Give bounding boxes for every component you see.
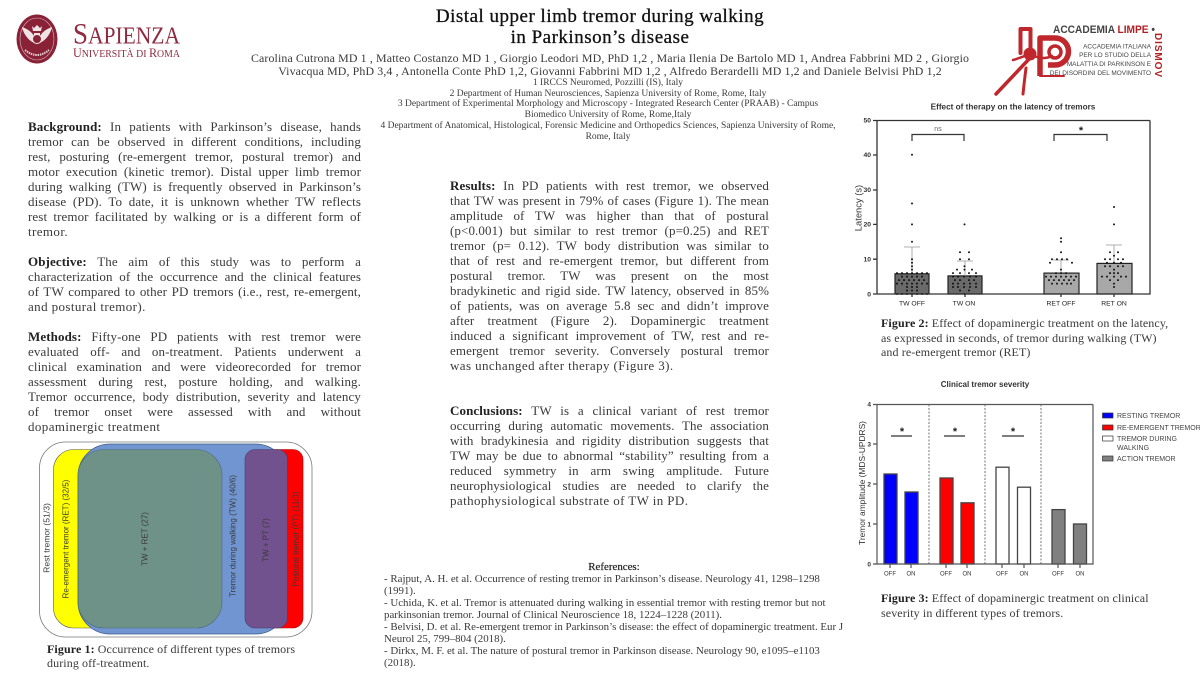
panel: re-emergent tremor <box>54 450 174 628</box>
y axis labels: 1 <box>867 522 871 528</box>
text block: background: rest, posturing (re-emergent tremor, postural tremor) and <box>28 149 361 164</box>
text block: objective: and postural tremor). <box>28 299 146 314</box>
legend: ACTION TREMOR <box>1117 456 1176 463</box>
text block: background <box>28 119 361 239</box>
text block: methods: clinical examination and were videorecorded for tremor <box>28 359 361 374</box>
text block: results: of patients, was on average 5.8 sec and didn’t improve <box>450 298 769 313</box>
references: - Rajput, A. H. et al. Occurrence of resting tremor in Parkinson’s disease. Neurology 41, 1298–1298 <box>384 573 820 585</box>
references: Neurol 25, 799–804 (2018). <box>384 633 506 645</box>
text block: results <box>450 178 769 373</box>
y axis labels: 30 <box>863 187 871 194</box>
legend <box>1102 413 1200 463</box>
logo: Accademia LIMPE-DISMOV: ACCADEMIA ITALIANA <box>1083 44 1152 50</box>
significance markers: * <box>953 426 958 438</box>
affiliations: Rome, Italy <box>586 132 630 142</box>
y axis title: Tremor amplitude (MDS-UPDRS) <box>857 421 867 545</box>
x axis labels: TW OFF <box>899 300 925 308</box>
logo: Accademia LIMPE-DISMOV: MALATTIA DI PARKINSON E <box>1067 61 1152 68</box>
significance brackets: * <box>1079 125 1084 137</box>
logo: Sapienza University of Rome: SAPIENZA <box>73 18 181 50</box>
diagram labels: Rest tremor (51/3) <box>42 503 52 573</box>
text block: methods: evaluated off- and on-treatment. Patients underwent a <box>28 344 361 359</box>
x axis labels: OFF <box>996 572 1008 578</box>
references heading: References: <box>588 561 640 573</box>
text block: background: motor execution (kinetic tremor). Distal upper limb tremor <box>28 164 361 179</box>
logo: Accademia LIMPE-DISMOV <box>994 24 1163 96</box>
text block: results: postural tremor. TW was present on the most <box>450 268 769 283</box>
y axis labels <box>867 402 871 568</box>
axes <box>873 404 1093 568</box>
legend: RE-EMERGENT TREMOR <box>1117 425 1200 432</box>
diagram labels: Re-emergent tremor (RET) (32/5) <box>62 479 70 598</box>
x axis labels: OFF <box>1052 572 1064 578</box>
diagram labels: TW + RET (27) <box>140 512 150 566</box>
text block: conclusions: pathophysiological substrate of TW in PD. <box>450 493 688 508</box>
references <box>384 561 843 669</box>
figure 2 caption: Figure 2: Effect of dopaminergic treatment on the latency, <box>881 316 1168 330</box>
significance brackets: ns <box>934 126 942 133</box>
figure 1 caption: during off-treatment. <box>47 656 150 670</box>
text block: conclusions: neurophysiological studies are needed to clarify the <box>450 478 769 493</box>
y axis labels <box>863 118 871 298</box>
axes <box>873 120 1150 297</box>
text block: conclusions: occurring during automatic movements. The association <box>450 418 769 433</box>
title: in Parkinson’s disease <box>511 26 689 48</box>
affiliations: Biomedico University of Rome, Rome,Italy <box>525 110 691 120</box>
text block: conclusions <box>450 403 769 508</box>
text block: background: tremor can be observed in different conditions, including <box>28 134 361 149</box>
panel: rest tremor <box>40 442 312 637</box>
text block: results: tremor (p= 0.12). TW body distribution was similar to <box>450 238 769 253</box>
affiliations: 2 Department of Human Neurosciences, Sapienza University of Rome, Rome, Italy <box>450 89 766 99</box>
text block: objective: characterization of the occurrence and the clinical features <box>28 269 361 284</box>
text block: results: that TW was present in 79% of cases (Figure 1). The mean <box>450 193 769 208</box>
diagram labels: Tremor during walking (TW) (40/6) <box>228 475 238 597</box>
error bars <box>904 245 1122 276</box>
logo: Accademia LIMPE-DISMOV: PER LO STUDIO DELLA <box>1079 52 1152 59</box>
diagram labels <box>42 475 300 598</box>
panel: TW + PT overlap <box>245 450 288 628</box>
y axis labels: 10 <box>863 256 871 264</box>
text block: results: amplitude of TW was higher than that of postural <box>450 208 769 223</box>
group dividers <box>929 404 1041 564</box>
panel: TW + RET overlap <box>78 450 222 628</box>
y axis labels: 50 <box>863 118 871 124</box>
text block: background: disease (PD). To date, it is unknown whether TW reflects <box>28 194 361 209</box>
bars <box>884 467 1086 564</box>
y axis labels: 4 <box>867 402 871 408</box>
significance markers: * <box>900 426 905 438</box>
affiliations: 1 IRCCS Neuromed, Pozzilli (IS), Italy <box>533 78 683 88</box>
chart title: Clinical tremor severity <box>941 380 1030 389</box>
diagram labels: Postural tremor (PT) (11/3) <box>292 491 300 586</box>
legend: RESTING TREMOR <box>1117 413 1180 420</box>
figure 1 caption <box>47 642 295 670</box>
bars <box>895 263 1132 294</box>
significance markers: * <box>1011 426 1016 438</box>
legend: WALKING <box>1117 445 1149 452</box>
text block: methods: dopaminergic treatment <box>28 419 160 434</box>
figure 2: latency bar chart <box>852 102 1151 308</box>
logo: Accademia LIMPE-DISMOV: DISMOV <box>1152 33 1163 77</box>
panel: postural tremor <box>245 450 303 628</box>
references: - Belvisi, D. et al. Re-emergent tremor in Parkinson’s disease: the effect of dopaminergic treatment. Eur J <box>384 621 843 633</box>
y axis title: Latency (s) <box>852 185 864 231</box>
text block: methods <box>28 329 361 434</box>
figure 2 caption: and re-emergent tremor (RET) <box>881 345 1031 359</box>
authors: Vivacqua MD, PhD 3,4 , Antonella Conte PhD 1,2, Giovanni Fabbrini MD 1,2 , Alfredo Berardelli MD 1,2 and Daniele Belvisi PhD 1,2 <box>278 64 942 78</box>
affiliations <box>380 78 836 142</box>
text block: conclusions: TW may be due to abnormal “stability” resulting from a <box>450 448 769 463</box>
references: (1991). <box>384 585 416 597</box>
text block: methods: Tremor occurrence, body distribution, severity and latency <box>28 389 361 404</box>
authors: Carolina Cutrona MD 1 , Matteo Costanzo MD 1 , Giorgio Leodori MD, PhD 1,2 , Maria Ilenia De Bartolo MD 1, Andrea Fabbrini MD 2 , Giorgio <box>251 51 969 65</box>
text block: methods: Methods: Fifty-one PD patients with rest tremor were <box>28 329 361 344</box>
text block: results: emergent tremor severity. Conversely postural tremor <box>450 343 769 358</box>
y axis labels: 3 <box>867 442 871 448</box>
text block: conclusions: reduced symmetry in arm swing amplitude. Future <box>450 463 769 478</box>
text block: results: induced a significant improvement of TW, rest and re- <box>450 328 769 343</box>
x axis labels: ON <box>1076 572 1084 578</box>
x axis labels: RET ON <box>1101 300 1127 308</box>
references: - Uchida, K. et al. Tremor is attenuated during walking in essential tremor with resting tremor but not <box>384 597 826 609</box>
logo: Sapienza University of Rome <box>16 14 181 64</box>
logo: Sapienza University of Rome: UNIVERSITÀ DI ROMA <box>73 45 180 60</box>
figure 2 caption: as expressed in seconds, of tremor during walking (TW) <box>881 330 1157 344</box>
text block: results: after treatment (Figure 2). Dopaminergic treatment <box>450 313 769 328</box>
diagram labels: TW + PT (7) <box>262 518 270 562</box>
x axis labels <box>884 572 1084 578</box>
x axis labels: TW ON <box>953 300 975 308</box>
text block: results: bradykinetic and rigid side. TW latency, observed in 85% <box>450 283 769 298</box>
figure 3: clinical tremor severity bar chart <box>857 380 1200 578</box>
y axis labels: 0 <box>867 292 871 298</box>
text block: objective <box>28 254 361 314</box>
y axis labels: 2 <box>867 482 871 488</box>
text block: objective: of TW compared to other PD tremors (i.e., rest, re-emergent, <box>28 284 361 299</box>
text block: methods: of tremor onset were assessed with and without <box>28 404 361 419</box>
figure 2 caption <box>881 316 1168 359</box>
data points <box>897 155 1126 294</box>
x axis labels <box>899 300 1127 308</box>
text block: conclusions: Conclusions: TW is a clinical variant of rest tremor <box>450 403 769 418</box>
significance brackets <box>912 125 1107 141</box>
x axis labels: OFF <box>940 572 952 578</box>
significance markers <box>891 426 1024 438</box>
chart title: Effect of therapy on the latency of tremors <box>931 102 1096 112</box>
y axis labels: 20 <box>863 222 871 228</box>
title: Distal upper limb tremor during walking <box>436 6 764 27</box>
figure 3 caption: Figure 3: Effect of dopaminergic treatment on clinical <box>881 591 1149 605</box>
references: - Dirkx, M. F. et al. The nature of postural tremor in Parkinson disease. Neurology 90, e1095–e1103 <box>384 645 820 657</box>
text block: conclusions: with bradykinesia and rigidity distribution suggests that <box>450 433 769 448</box>
figure 3 caption <box>881 591 1149 620</box>
text block: background: during walking (TW) is frequently observed in Parkinson’s <box>28 179 361 194</box>
x axis labels: OFF <box>884 572 896 578</box>
text block: results: that of rest and re-emergent tremor, but different from <box>450 253 769 268</box>
y axis labels: 0 <box>867 562 871 568</box>
panel: tremor during walking <box>78 444 288 634</box>
legend: TREMOR DURING <box>1117 436 1177 443</box>
text block: background: rest tremor facilitated by walking or is a different form of <box>28 209 361 224</box>
affiliations: 4 Department of Anatomical, Histological, Forensic Medicine and Orthopedics Sciences, Sapienza University of Rome, <box>380 121 836 131</box>
text block: results: Results: In PD patients with rest tremor, we observed <box>450 178 769 193</box>
y axis labels: 40 <box>863 152 871 159</box>
authors <box>251 51 969 78</box>
text block: objective: Objective: The aim of this study was to perform a <box>28 254 361 269</box>
text block: background: tremor. <box>28 224 68 239</box>
logo: Accademia LIMPE-DISMOV: DEI DISORDINI DEL MOVIMENTO <box>1050 70 1151 77</box>
references: parkinsonian tremor. Journal of Clinical Neuroscience 18, 1224–1228 (2011). <box>384 609 722 621</box>
logo: Accademia LIMPE-DISMOV: ACCADEMIA LIMPE • <box>1053 24 1155 36</box>
figure 1: tremor occurrence diagram <box>39 442 312 638</box>
x axis labels: ON <box>1020 572 1028 578</box>
x axis labels: ON <box>962 572 972 578</box>
text block: results: (p<0.001) but similar to rest tremor (p=0.25) and RET <box>450 223 769 238</box>
text block: background: Background: In patients with Parkinson’s disease, hands <box>28 119 361 134</box>
affiliations: 3 Department of Experimental Morphology and Microscopy - Integrated Research Center (PRAAB) - Campus <box>398 99 818 109</box>
figure 3 caption: severity in different types of tremors. <box>881 606 1063 620</box>
title <box>436 6 764 48</box>
text block: results: was unchanged after therapy (Figure 3). <box>450 358 674 373</box>
x axis labels: RET OFF <box>1047 300 1075 308</box>
references: (2018). <box>384 657 416 669</box>
text block: methods: assessment during rest, posture holding, and walking. <box>28 374 361 389</box>
figure 1 caption: Figure 1: Occurrence of different types of tremors <box>47 642 295 656</box>
x axis labels: ON <box>906 572 916 578</box>
